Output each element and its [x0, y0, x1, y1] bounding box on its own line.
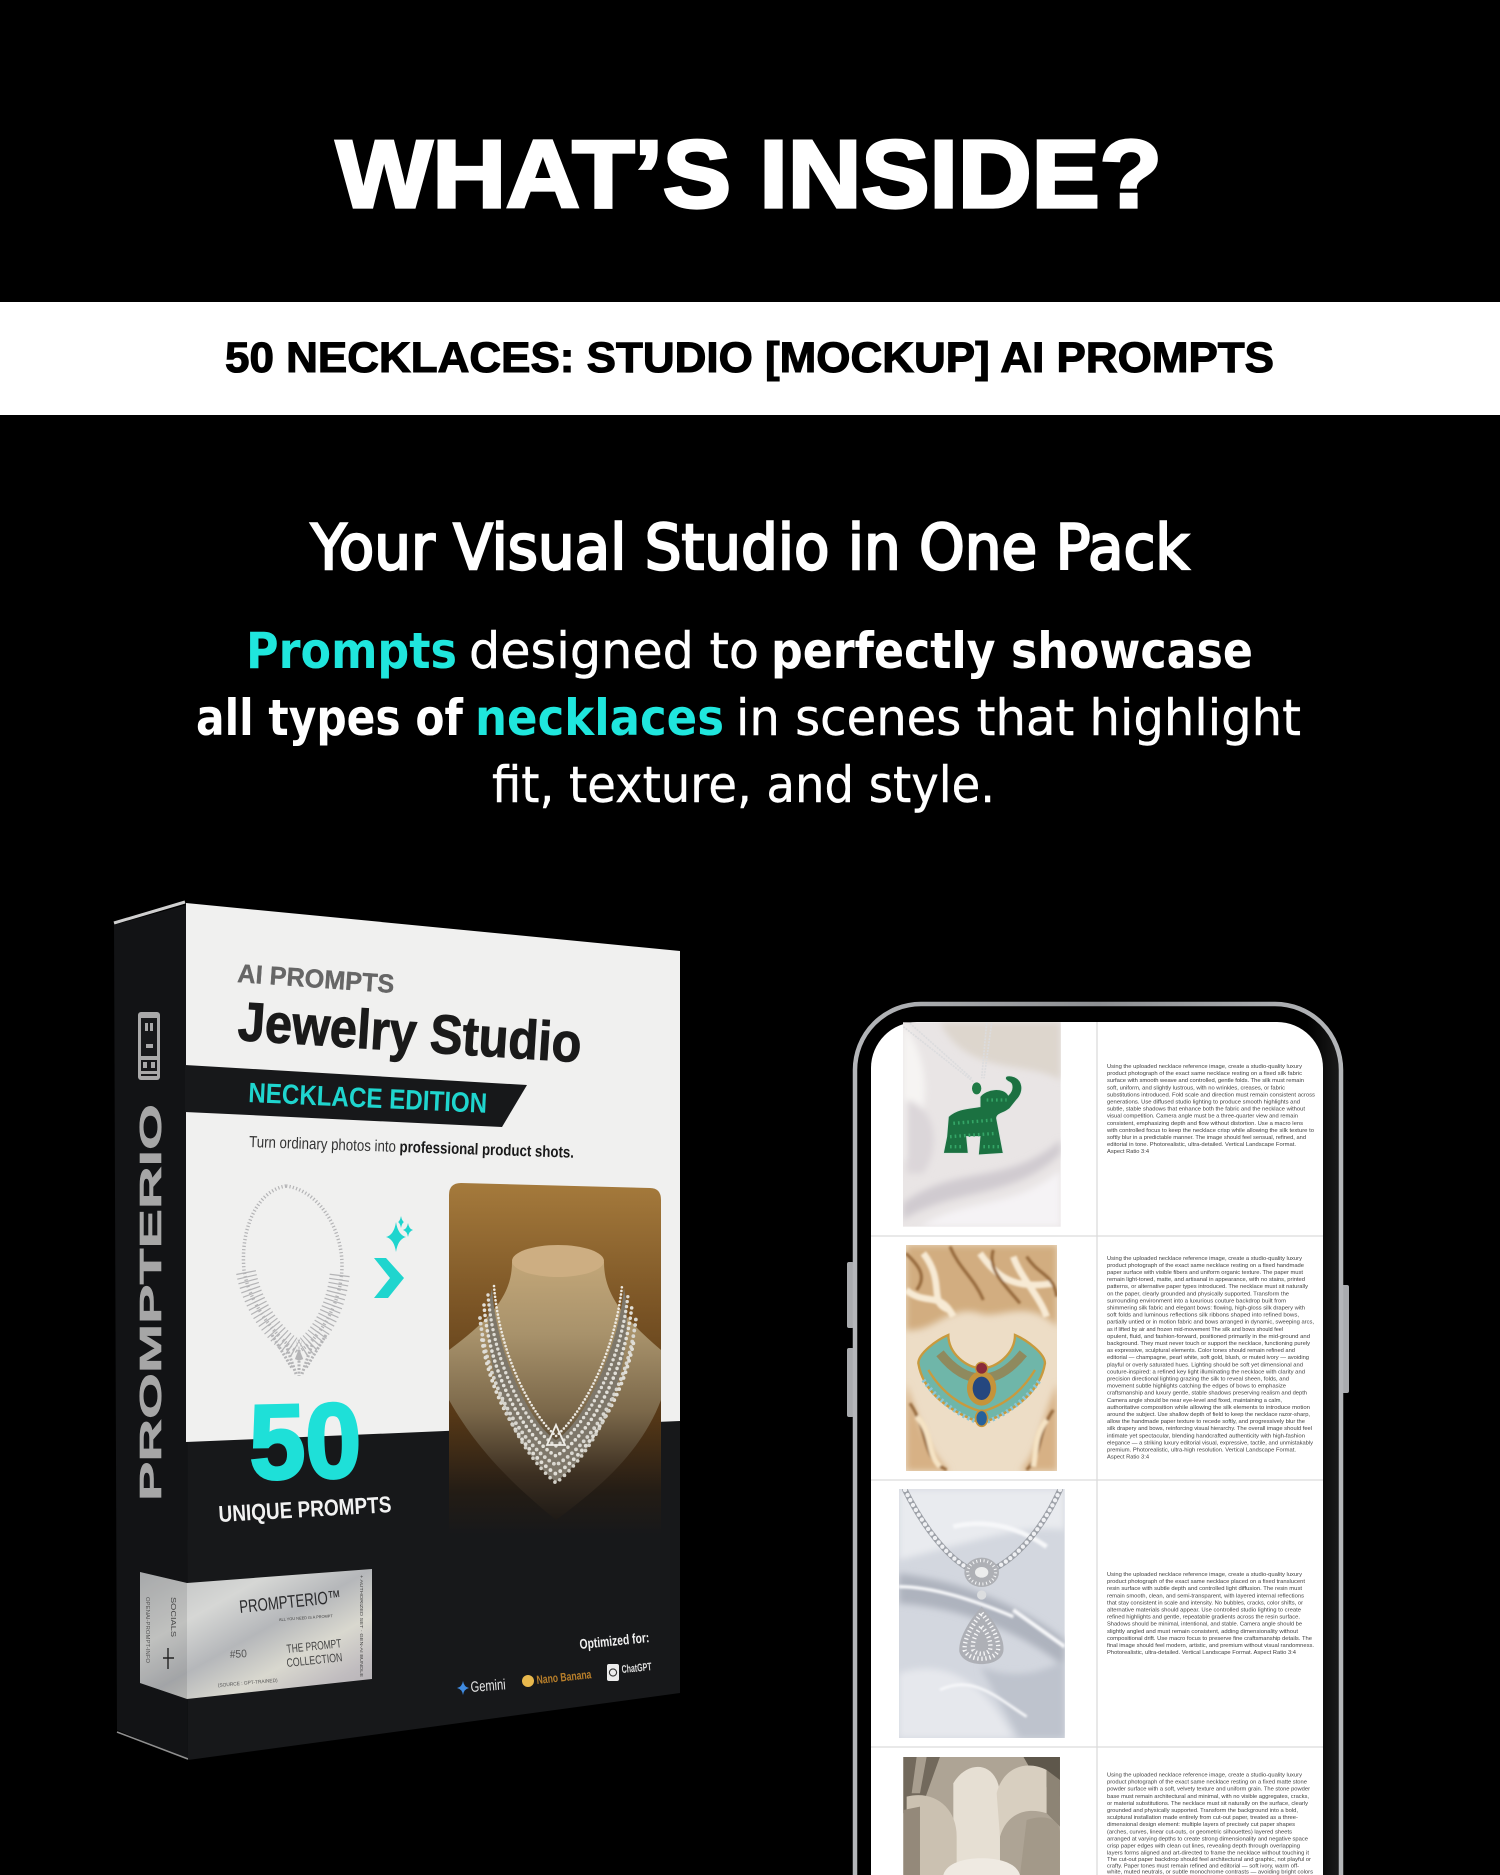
heading: your visual studio: Your Visual Studio in One Pack: [310, 511, 1189, 584]
description text block: Prompts: [246, 622, 457, 680]
box front dark: [186, 905, 680, 1760]
holographic sticker: ALL YOU NEED IS A PROMPT: [279, 1613, 333, 1622]
description text block: fit, texture, and style.: [492, 756, 995, 814]
collar: [918, 1335, 1045, 1423]
prompt text: stone powder: Using the uploaded necklace reference image, create a studio-quality luxury: [1107, 1772, 1302, 1778]
prompt text: stone powder: or material substitutions. The necklace must sit naturally on the surface, clearly: [1107, 1801, 1308, 1807]
box heading: jewelry studio: Jewelry Studio: [236, 990, 584, 1074]
prompt text: resin: refined highlights and gentle, repeatable gradients across the resin surface.: [1107, 1615, 1300, 1621]
side buttons: [847, 1262, 1349, 1417]
prompt text: stone powder: grounded and physically supported. Transform the background into a bold,: [1107, 1808, 1298, 1814]
prompt text: handmade paper: elegance — a striking luxury editorial visual, expressive, tactile, and unmistakably: [1107, 1440, 1313, 1446]
subtitle: 50 NECKLACES: STUDIO [MOCKUP] AI PROMPTS: [225, 334, 1274, 382]
prompt text: handmade paper: as expressive, sculptural elements. Color tones should remain refined and: [1107, 1348, 1295, 1354]
prompt text: silk: surface with smooth weave and controlled, gentle folds. The silk must remain: [1107, 1078, 1304, 1084]
prompt text: handmade paper: patterns, or alternative paper types introduced. The necklace must sit naturally: [1107, 1284, 1308, 1290]
prompt text: stone powder: crafty. Paper tones must remain refined and editorial — soft ivory, warm off-: [1107, 1864, 1299, 1870]
spine logo: [138, 1012, 160, 1080]
sticker wordmark: PROMPTERIO™: [238, 1586, 342, 1617]
photo: collar necklace on gold silk: [906, 1245, 1057, 1471]
prompt text: resin: product photograph of the exact same necklace placed on a fixed translucent: [1107, 1579, 1305, 1585]
prompt text: stone powder: layers forms aligned and art-directed to frame the necklace without touching it: [1107, 1851, 1309, 1857]
prompt text: silk: editorial in tone. Photorealistic, ultra-detailed. Vertical Landscape Format.: [1107, 1142, 1296, 1148]
edition label: NECKLACE EDITION: [248, 1077, 488, 1119]
prompt text: resin: resin surface with subtle depth and controlled light diffusion. The resin must: [1107, 1586, 1302, 1592]
chatgpt logo: [607, 1664, 619, 1681]
prompt text: resin: compositional drift. Use macro focus to preserve fine craftsmanship details. The: [1107, 1636, 1312, 1642]
prompt text: handmade paper: as if lifted by air and frozen mid-movement The silk and bows should feel: [1107, 1327, 1283, 1333]
prompt text: silk: [1106, 1064, 1315, 1155]
prompt text: handmade paper: paper surface with visible fibers and uniform organic texture. The paper must: [1107, 1270, 1303, 1276]
optimized for row: Optimized for:: [579, 1629, 650, 1652]
prompt text: resin: Using the uploaded necklace reference image, create a studio-quality luxury: [1107, 1572, 1302, 1578]
prompt text: handmade paper: movement subtle highlights catching the edges of bows to emphasize: [1107, 1384, 1286, 1390]
sparkle icon: [386, 1216, 413, 1252]
prompt text: stone powder: base must remain architectural and minimal, with no visible aggregates, cracks,: [1107, 1794, 1309, 1800]
prompt text: handmade paper: around the subject. Use shallow depth of field to keep the necklace razor-sharp,: [1107, 1412, 1310, 1418]
prompt text: silk: with controlled focus to keep the necklace crisp while allowing the silk texture to: [1106, 1128, 1314, 1134]
nano banana logo: [522, 1675, 534, 1687]
prompt text: handmade paper: premium. Photorealistic, ultra-high resolution. Vertical Landscape Format.: [1107, 1448, 1296, 1454]
prompt text: stone powder: [1106, 1772, 1313, 1875]
prompt text: resin: Shadows should be minimal, intentional, and stable. Camera angle should be: [1107, 1622, 1302, 1628]
holographic sticker: #50: [230, 1648, 247, 1661]
holographic sticker: [140, 1569, 372, 1699]
prompt text: handmade paper: silk drapery and bows, reinforcing visual hierarchy. The overall image should feel: [1107, 1426, 1312, 1432]
prompt text: silk: consistent, emphasizing depth and flow without distortion. Use a macro lens: [1107, 1121, 1303, 1127]
prompt text: silk: Using the uploaded necklace reference image, create a studio-quality luxury: [1107, 1064, 1302, 1070]
prompt text: silk: Aspect Ratio 3:4: [1107, 1149, 1149, 1155]
photo: diamond necklace on pearl resin: [899, 1489, 1065, 1738]
description text block: all types of: [196, 689, 464, 747]
prompt text: handmade paper: opulent, fluid, and fashion-forward, positioned primarily in the mid-ground and: [1107, 1334, 1310, 1340]
prompt text: handmade paper: product photograph of the exact same necklace resting on a fixed handmade: [1107, 1263, 1304, 1269]
table lines: [871, 1022, 1323, 1875]
phone screen: [871, 1022, 1323, 1875]
prompt text: handmade paper: allow the handmade paper texture to recede softly, and progressively blur the: [1107, 1419, 1305, 1425]
product photo panel: [449, 1183, 661, 1535]
tagline: Turn ordinary photos into professional product shots.: [249, 1134, 574, 1162]
prompt text: silk: softly blur in a predictable manner. The image should feel sensual, refined, and: [1107, 1135, 1306, 1141]
optimized for row: [457, 1629, 652, 1696]
description text block: necklaces: [475, 689, 724, 747]
prompt text: handmade paper: craftsmanship and luxury gentle, stable shadows preserving realism and depth: [1107, 1391, 1307, 1397]
holographic sticker: SOCIALS: [169, 1597, 176, 1637]
prompt text: resin: remain smooth, clean, and semi-transparent, with layered internal reflections: [1107, 1593, 1304, 1599]
prompt text: handmade paper: playful or overly saturated hues. Lighting should be soft yet dimensional and: [1107, 1362, 1303, 1368]
holographic sticker: (SOURCE : GPT-TRAINED): [218, 1678, 278, 1689]
prompt text: stone powder: crisp paper edges with clean cut lines, revealing depth through overlapping: [1107, 1844, 1300, 1850]
box front white panel: [186, 903, 680, 1442]
necklace edition band: [185, 1065, 527, 1127]
prompt text: handmade paper: couture-inspired: a refined key light illuminating the necklace with clarity and: [1107, 1369, 1305, 1375]
arrow chevron: [374, 1258, 404, 1298]
prompt text: resin: [1107, 1572, 1314, 1656]
description text block: in scenes that highlight: [736, 689, 1301, 747]
prompt text: handmade paper: soft folds and luminous reflections silk ribbons shaped into refined bows,: [1107, 1313, 1299, 1319]
prompt text: stone powder: (arches, curves, linear cut-outs, or geometric silhouettes) layered sheets: [1107, 1829, 1292, 1835]
prompt text: handmade paper: [1107, 1256, 1314, 1461]
prompt text: stone powder: arranged at varying depths to create strong dimensionality and negative space: [1107, 1836, 1308, 1842]
prompt text: handmade paper: Camera angle should be near eye-level and fixed, maintaining a calm,: [1107, 1398, 1282, 1404]
holographic sticker: OPENAI-PROMPT-INFO: [144, 1597, 150, 1664]
spine wordmark: PROMPTERIO: [133, 1104, 168, 1501]
description text block: [196, 622, 1301, 814]
prompt text: handmade paper: precision directional lighting grazing the silk to reveal sheen, folds, and: [1107, 1376, 1289, 1382]
prompt text: handmade paper: surrounding environment into a luxurious couture backdrop built from: [1107, 1298, 1286, 1304]
product box: [114, 902, 680, 1760]
mannequin bust: [449, 1262, 661, 1520]
holographic sticker: THE PROMPT: [286, 1636, 342, 1656]
prompt text: stone powder: dimensional design element: multiple layers of precisely cut paper shapes: [1107, 1822, 1295, 1828]
necklace sketch: [243, 1186, 342, 1376]
prompt text: resin: final image should feel modern, artistic, and premium without visual randomness.: [1107, 1643, 1314, 1649]
optimized for row: Gemini: [470, 1676, 506, 1696]
prompt text: resin: slightly angled and must remain consistent, adding dimensionality without: [1107, 1629, 1298, 1635]
prompt text: silk: substitutions introduced. Fold scale and direction must remain consistent across: [1107, 1092, 1315, 1098]
prompt text: handmade paper: background. They must never touch or support the necklace, functioning purely: [1107, 1341, 1310, 1347]
prompt text: resin: Photorealistic, ultra-detailed. Vertical Landscape Format. Aspect Ratio 3:4: [1107, 1650, 1296, 1656]
prompt text: handmade paper: partially untied or in motion fabric and bows arranged in dynamic, sweeping arcs,: [1107, 1320, 1314, 1326]
prompt text: stone powder: sculptural installation made entirely from cut-out paper, treated as a three-: [1107, 1815, 1298, 1821]
prompt text: handmade paper: remain light-toned, matte, and artisanal in appearance, with no stains, printed: [1107, 1277, 1305, 1283]
prompt text: handmade paper: authoritative composition while allowing the silk elements to introduce motion: [1107, 1405, 1310, 1411]
prompt text: handmade paper: intimate yet spectacular, blending handcrafted authenticity with high-fashion: [1107, 1433, 1305, 1439]
unique prompts label: UNIQUE PROMPTS: [218, 1491, 392, 1527]
number 50: 50: [248, 1382, 362, 1502]
prompt text: resin: alternative materials should appear. Use controlled studio lighting to create: [1107, 1608, 1301, 1614]
optimized for row: Nano Banana: [536, 1667, 592, 1687]
prompt text: handmade paper: Using the uploaded necklace reference image, create a studio-quality luxury: [1107, 1256, 1302, 1262]
subtitle band: [0, 302, 1500, 415]
prompt text: handmade paper: Aspect Ratio 3:4: [1107, 1455, 1149, 1461]
phone frame: [855, 1004, 1341, 1875]
prompt text: silk: generations. Use diffused studio lighting to produce smooth highlights and: [1107, 1100, 1300, 1106]
holographic sticker: + AUTHORIZED SET · GEN-AI BUNDLE: [359, 1575, 364, 1677]
photo: paper cut-out arches: [903, 1757, 1060, 1875]
prompt text: resin: that stay consistent in scale and intensity. No bubbles, cracks, color shifts, or: [1107, 1600, 1303, 1606]
description text block: designed to: [469, 622, 759, 680]
prompt text: handmade paper: editorial — champagne, pearl white, soft gold, blush, or muted ivory — avoiding: [1107, 1355, 1309, 1361]
photo: elephant pendant on silk: [903, 1022, 1061, 1227]
prompt text: silk: product photograph of the exact same necklace resting on a fixed silk fabric: [1107, 1071, 1302, 1077]
prompt text: handmade paper: on the paper, clearly grounded and physically supported. Transform the: [1107, 1291, 1289, 1297]
prompt text: silk: soft, uniform, and slightly lustrous, with no wrinkles, creases, or fabric: [1107, 1085, 1285, 1091]
prompt text: silk: subtle, stable shadows that enhance both the fabric and the necklace without: [1107, 1107, 1305, 1113]
prompt text: handmade paper: shimmering silk fabric and elegant bows: flowing, high-gloss silk drapery with: [1107, 1306, 1305, 1312]
description text block: perfectly showcase: [771, 622, 1253, 680]
optimized for row: ChatGPT: [621, 1661, 652, 1676]
prompt text: stone powder: The cut-out paper backdrop should feel architectural and graphic, not playful or: [1107, 1857, 1311, 1863]
title: WHAT’S INSIDE?: [336, 121, 1162, 228]
box heading: ai prompts: AI PROMPTS: [237, 958, 395, 999]
holographic sticker: COLLECTION: [286, 1650, 343, 1670]
diamond necklace: [480, 1286, 636, 1483]
prompt text: stone powder: powder surface with a soft, velvety texture and uniform grain. The stone powder: [1107, 1787, 1310, 1793]
prompt text: silk: visual competition. Camera angle must be a three-quarter view and remain: [1107, 1114, 1298, 1120]
prompt text: stone powder: product photograph of the exact same necklace resting on a fixed matte stone: [1107, 1780, 1307, 1786]
gemini logo: [457, 1681, 469, 1695]
phone mockup: [847, 1004, 1349, 1875]
box side spine: [114, 902, 188, 1760]
